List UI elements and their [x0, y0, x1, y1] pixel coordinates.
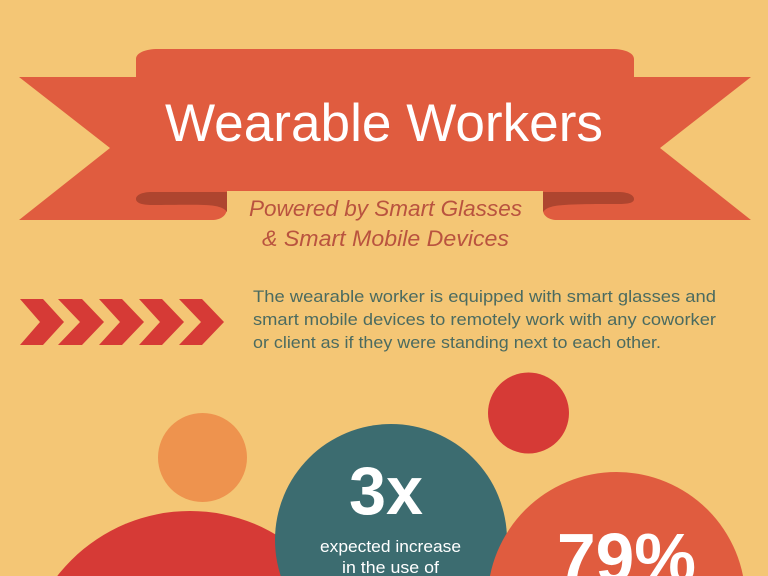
subtitle — [249, 196, 522, 251]
title: Wearable Workers — [165, 94, 603, 153]
stat description — [320, 538, 461, 576]
circle: large red — [22, 511, 358, 576]
stat circle: 3x — [275, 424, 507, 576]
description text — [253, 288, 717, 352]
subtitle: & Smart Mobile Devices — [262, 226, 509, 251]
circle: small red decoration — [488, 372, 569, 454]
circle: orange decoration — [158, 413, 247, 502]
description text: or client as if they were standing next to each other. — [253, 334, 661, 352]
ribbon banner — [19, 49, 751, 220]
stat circle: 79% — [488, 472, 746, 576]
ribbon fold: left — [136, 192, 227, 212]
icon: chevron arrows — [20, 299, 224, 345]
description text: smart mobile devices to remotely work with any coworker — [253, 311, 717, 329]
stat value: 3x: 3x — [349, 453, 423, 529]
description text: The wearable worker is equipped with smart glasses and — [253, 288, 716, 306]
ribbon fold: right — [543, 192, 634, 212]
stat description: expected increase — [320, 538, 461, 556]
subtitle: Powered by Smart Glasses — [249, 196, 522, 221]
